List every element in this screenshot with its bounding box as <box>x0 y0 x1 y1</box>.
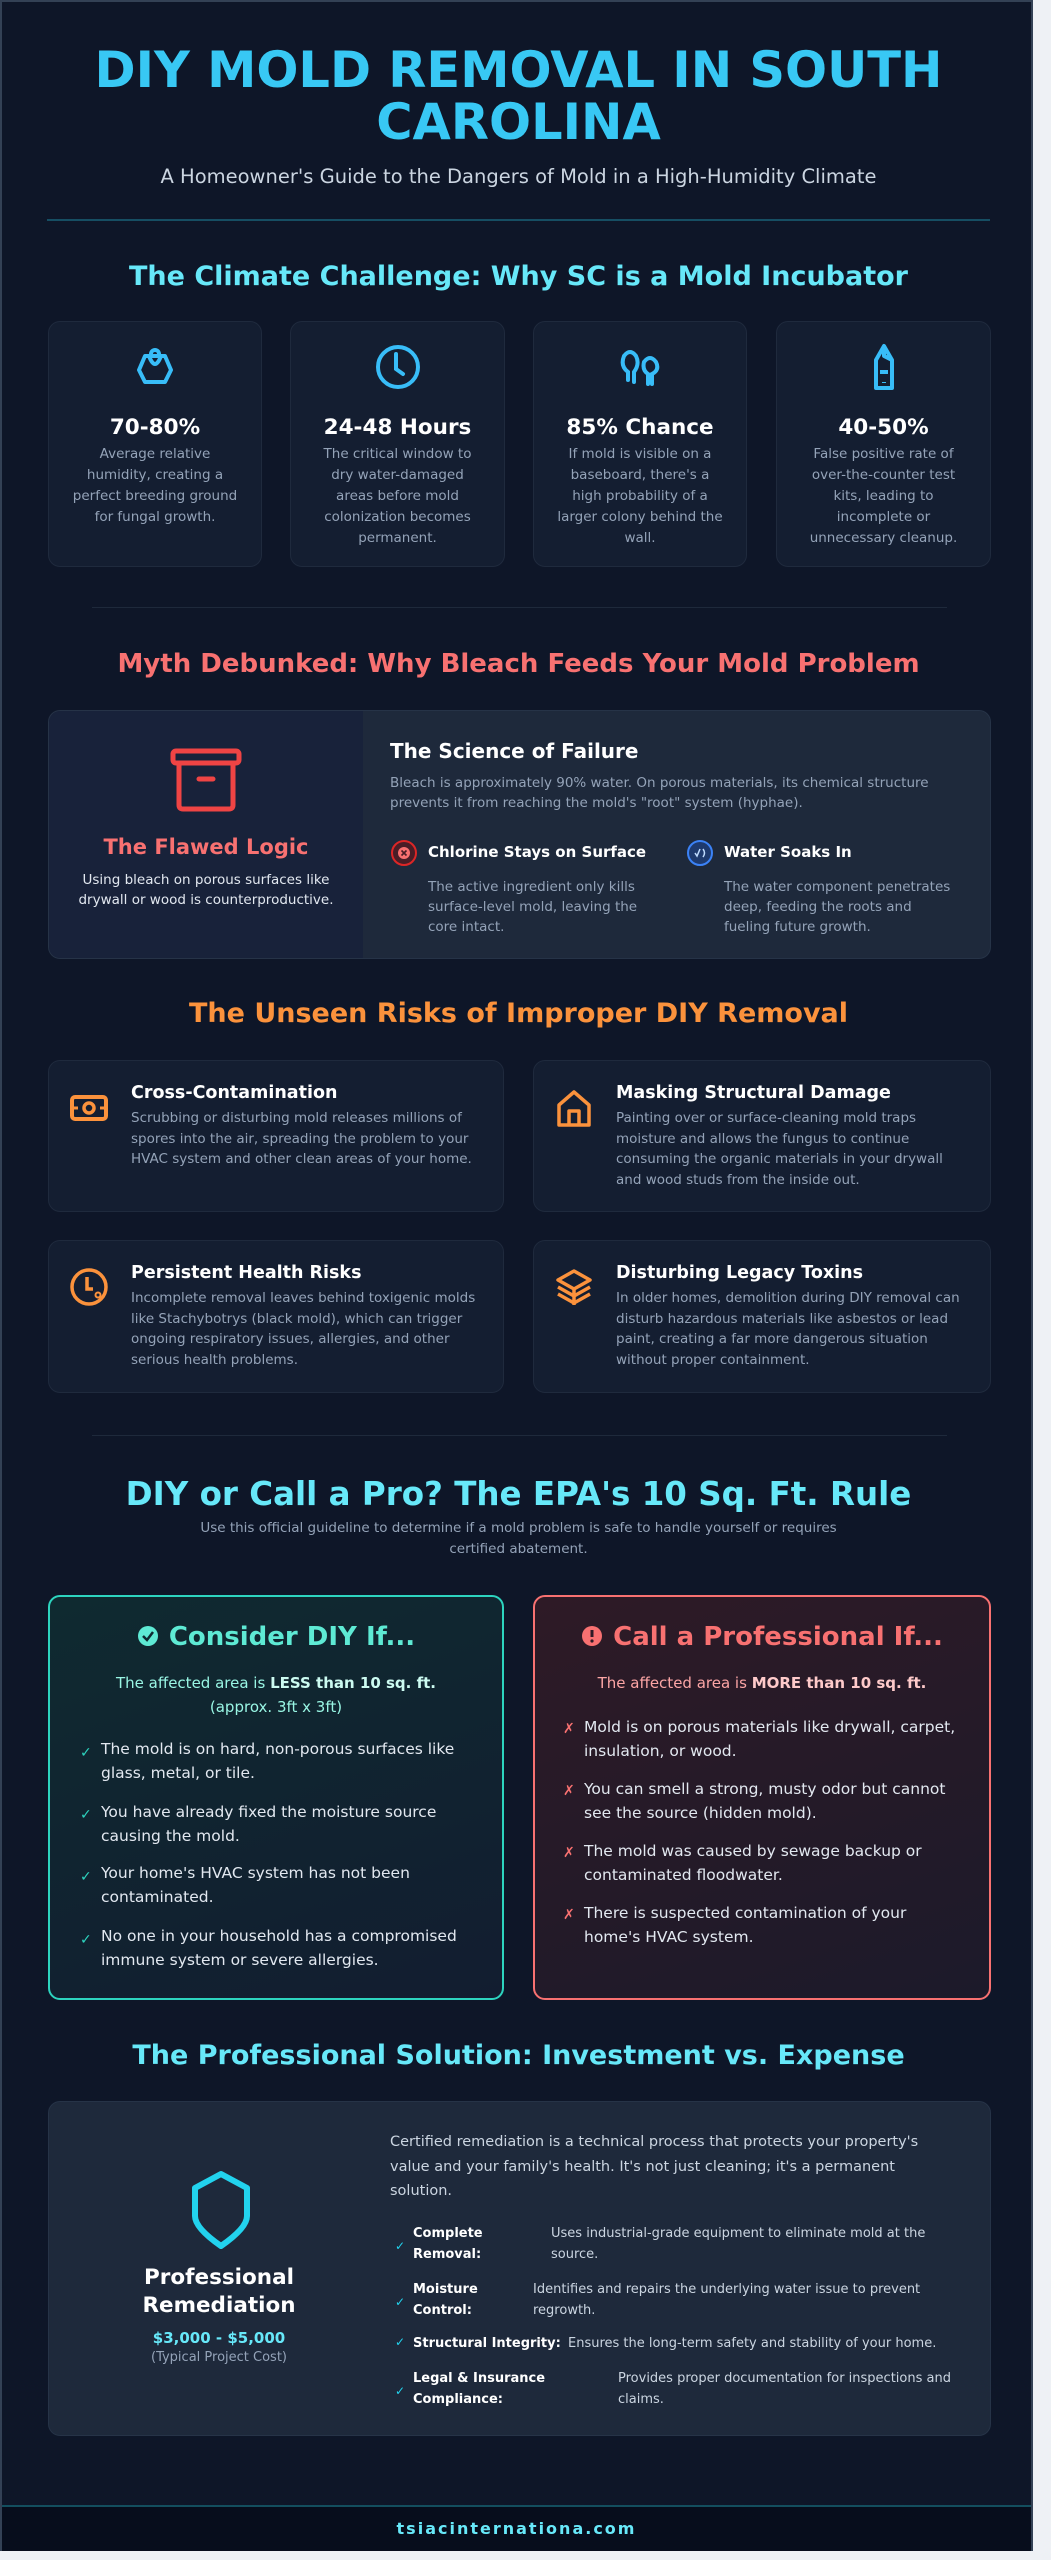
flawed logic block: The Flawed Logic <box>103 835 309 859</box>
card: humidity: Average relative humidity, creating a perfect breeding ground for fungal growth. <box>73 446 237 525</box>
card: health risks <box>48 1240 504 1393</box>
heading: myth debunked: Myth Debunked: Why Bleach Feeds Your Mold Problem <box>117 649 920 679</box>
panel: call a professional: You can smell a strong, musty odor but cannot see the source (hidden mold). <box>584 1780 945 1822</box>
icon: humidity <box>137 348 173 384</box>
item: chlorine: The active ingredient only kills surface-level mold, leaving the core intact. <box>428 879 637 935</box>
flawed logic block: Using bleach on porous surfaces like drywall or wood is counterproductive. <box>78 872 334 908</box>
benefits list: Moisture <box>413 2282 478 2297</box>
panel: consider DIY <box>48 1595 504 2000</box>
icon: house <box>557 1090 591 1127</box>
benefits list: Identifies and repairs the underlying water issue to prevent regrowth. <box>533 2282 920 2318</box>
card: cross-contamination: Cross-Contamination <box>131 1083 337 1103</box>
card: health risks: Persistent Health Risks <box>131 1263 362 1283</box>
benefits list: Provides proper documentation for inspections and claims. <box>618 2371 951 2407</box>
icon: bleach container <box>170 748 242 812</box>
icon: test kit <box>874 344 894 390</box>
card: chance: If mold is visible on a baseboard, there's a high probability of a larger colony behind the wall. <box>557 446 723 546</box>
panel: call a professional: ✗ <box>563 1845 575 1861</box>
benefits list: Compliance: <box>413 2392 503 2407</box>
card: cross-contamination: Scrubbing or disturbing mold releases millions of spores into the air, spreading the problem to your HVAC system and other clean areas of your home. <box>131 1110 472 1167</box>
card: structural damage <box>533 1060 991 1212</box>
card: chance: 85% Chance <box>566 415 714 440</box>
card: legacy toxins: In older homes, demolition during DIY removal can disturb hazardous materials like asbestos or lead paint, creating a far more dangerous situation without proper containment. <box>616 1290 960 1368</box>
benefits list: ✓ <box>395 2295 405 2309</box>
benefits list: ✓ <box>395 2335 405 2349</box>
cost block: Remediation <box>142 2293 296 2318</box>
panel: consider DIY: The affected area is LESS than 10 sq. ft. <box>116 1674 436 1692</box>
cost block: $3,000 - $5,000 <box>153 2329 285 2347</box>
card: hours: 24-48 Hours <box>324 415 471 440</box>
card: structural damage: Masking Structural Damage <box>616 1083 891 1103</box>
heading: professional: Call a Professional If... <box>613 1622 943 1652</box>
cost block: (Typical Project Cost) <box>151 2350 287 2365</box>
science of failure block <box>390 739 950 935</box>
item: water <box>687 840 950 935</box>
panel: consider DIY: The mold is on hard, non-porous surfaces like glass, metal, or tile. <box>101 1740 454 1782</box>
title: DIY MOLD REMOVAL IN SOUTH <box>95 41 942 99</box>
panel: consider DIY: ✓ <box>80 1869 92 1885</box>
heading: DIY: Consider DIY If... <box>169 1622 415 1652</box>
panel: consider DIY: (approx. 3ft x 3ft) <box>210 1698 342 1716</box>
icon: air unit <box>70 1095 108 1121</box>
card: hours: The critical window to dry water-damaged areas before mold colonization becomes permanent. <box>324 446 471 546</box>
panel: consider DIY: ✓ <box>80 1932 92 1948</box>
cost block: Professional <box>144 2265 294 2290</box>
panel: bleach myth: The Science of Failure <box>390 739 638 763</box>
heading: climate challenge: The Climate Challenge: Why SC is a Mold Incubator <box>129 261 908 292</box>
benefits list: Legal & Insurance <box>413 2371 545 2386</box>
panel: consider DIY: You have already fixed the moisture source causing the mold. <box>101 1803 436 1845</box>
panel: consider DIY: No one in your household has a compromised immune system or severe allergies. <box>101 1927 457 1969</box>
benefits list: Structural Integrity: <box>413 2336 561 2351</box>
card: false positive: 40-50% <box>838 415 929 440</box>
card: chance <box>533 321 747 567</box>
title <box>95 41 942 151</box>
panel: consider DIY: Your home's HVAC system has not been contaminated. <box>101 1864 410 1906</box>
benefits list: Removal: <box>413 2247 481 2262</box>
benefits list: ✓ <box>395 2384 405 2398</box>
risk cards <box>48 1060 991 1393</box>
footer: tsiacinternationa.com <box>397 2519 636 2538</box>
heading: unseen risks: The Unseen Risks of Improper DIY Removal <box>189 998 848 1029</box>
flawed logic block <box>49 711 363 960</box>
card: false positive <box>776 321 991 567</box>
card: humidity: 70-80% <box>110 415 200 440</box>
icon: clock <box>376 345 420 389</box>
card: structural damage: Painting over or surface-cleaning mold traps moisture and allows the fungus to continue consuming the organic materials in your drywall and wood studs from the inside out. <box>616 1110 943 1188</box>
icon: spores <box>620 350 660 386</box>
panel: call a professional: There is suspected contamination of your home's HVAC system. <box>584 1904 906 1946</box>
EPA subtitle: Use this official guideline to determine if a mold problem is safe to handle yourself or requires certified abatement. <box>200 1520 837 1557</box>
panel: call a professional: Mold is on porous materials like drywall, carpet, insulation, or wood. <box>584 1718 955 1760</box>
heading: EPA rule: DIY or Call a Pro? The EPA's 10 Sq. Ft. Rule <box>126 1475 911 1513</box>
panel: consider DIY: ✓ <box>80 1745 92 1761</box>
benefits list: ✓ <box>395 2239 405 2253</box>
description: Certified remediation is a technical process that protects your property's value and your family's health. It's not just cleaning; it's a permanent solution. <box>390 2134 918 2199</box>
panel: bleach myth: Bleach is approximately 90% water. On porous materials, its chemical structure prevents it from reaching the mold's "root" system (hyphae). <box>390 775 929 811</box>
card: hours <box>290 321 505 567</box>
panel: consider DIY: ✓ <box>80 1807 92 1823</box>
benefits list: Control: <box>413 2303 472 2318</box>
panel: call a professional: The affected area is MORE than 10 sq. ft. <box>598 1674 926 1692</box>
title: CAROLINA <box>376 93 661 151</box>
panel: call a professional: ✗ <box>563 1783 575 1799</box>
item: chlorine: Chlorine Stays on Surface <box>428 843 646 861</box>
card: health risks: Incomplete removal leaves behind toxigenic molds like Stachybotrys (black mold), which can trigger ongoing respiratory issues, allergies, and other serious health problems. <box>131 1290 475 1368</box>
item: water: Water Soaks In <box>724 843 852 861</box>
panel: call a professional <box>533 1595 991 2000</box>
card: humidity <box>48 321 262 567</box>
card: false positive: False positive rate of over-the-counter test kits, leading to incomplete or unnecessary cleanup. <box>810 446 957 546</box>
card: legacy toxins <box>533 1240 991 1393</box>
panel: professional solution <box>48 2101 991 2436</box>
panel: call a professional: ✗ <box>563 1907 575 1923</box>
benefits list: Complete <box>413 2226 483 2241</box>
panel: call a professional: ✗ <box>563 1721 575 1737</box>
card: cross-contamination <box>48 1060 504 1212</box>
icon: health clock <box>70 1268 108 1306</box>
icon: shield <box>192 2171 250 2249</box>
stat cards <box>48 321 991 567</box>
item: water: The water component penetrates deep, feeding the roots and fueling future growth. <box>724 879 950 935</box>
benefits list: Uses industrial-grade equipment to eliminate mold at the source. <box>551 2226 925 2262</box>
icon: layers <box>556 1269 592 1305</box>
card: legacy toxins: Disturbing Legacy Toxins <box>616 1263 863 1283</box>
panel: call a professional: The mold was caused by sewage backup or contaminated floodwater. <box>584 1842 922 1884</box>
panel: bleach myth <box>48 710 991 959</box>
subtitle: A Homeowner's Guide to the Dangers of Mold in a High-Humidity Climate <box>160 165 876 188</box>
benefits list <box>395 2226 951 2407</box>
footer <box>2 2505 1031 2551</box>
benefits list: Ensures the long-term safety and stability of your home. <box>568 2336 936 2351</box>
heading: professional solution: The Professional Solution: Investment vs. Expense <box>132 2040 905 2071</box>
cost block <box>142 2265 296 2365</box>
item: chlorine <box>391 840 646 935</box>
